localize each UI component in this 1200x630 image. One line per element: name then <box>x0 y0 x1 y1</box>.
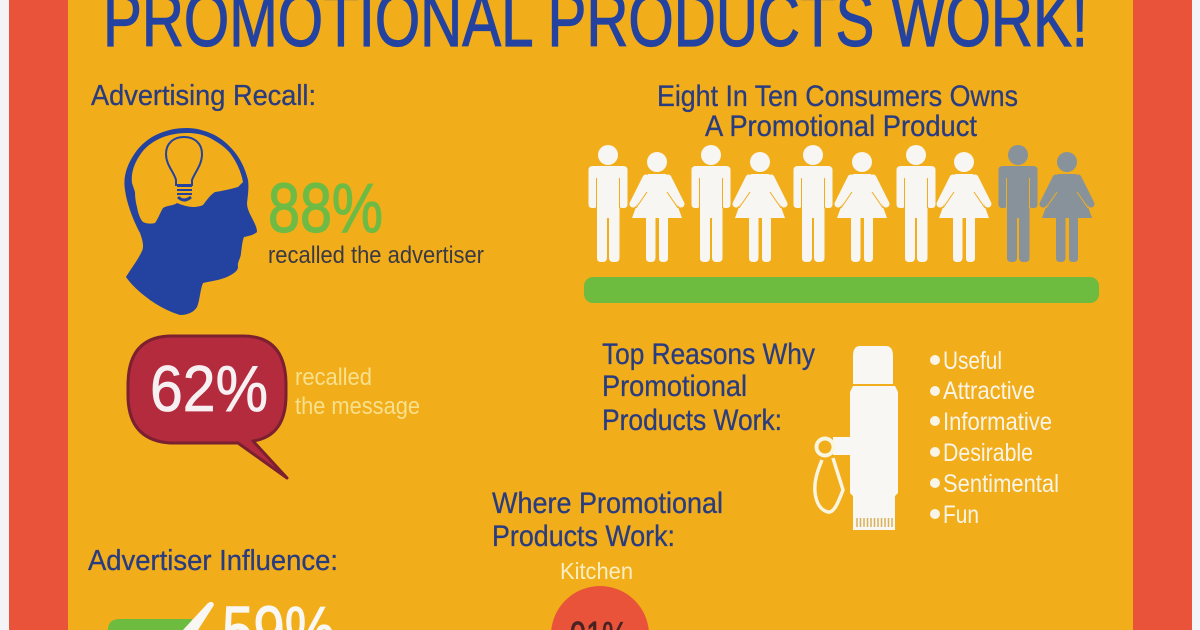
heading: where promotional products work: Where Promotional <box>492 487 723 520</box>
speech bubble: 62% <box>128 336 287 478</box>
label: recalled the message: recalled <box>295 364 372 391</box>
list: reasons: Useful <box>943 347 1002 375</box>
heading: top reasons: Top Reasons Why <box>602 338 815 371</box>
icon: head with light bulb <box>124 128 257 315</box>
heading: where promotional products work <box>492 487 723 553</box>
list: reasons: Informative <box>943 408 1052 436</box>
pictogram: people <box>588 145 1092 262</box>
stat: 88%: 88% <box>268 169 383 247</box>
list: reasons: Fun <box>943 501 979 529</box>
heading: advertising recall: Advertising Recall: <box>91 80 316 112</box>
icon: thermos <box>815 346 898 530</box>
heading: advertiser influence: Advertiser Influence: <box>88 545 338 577</box>
heading: top reasons: Promotional <box>602 370 747 403</box>
speech bubble: 62%: 62% <box>150 352 268 425</box>
heading: top reasons <box>602 338 815 437</box>
heading: where promotional products work: Products Work: <box>492 520 675 553</box>
label: recalled the message <box>295 364 420 420</box>
label: kitchen: Kitchen <box>560 558 633 584</box>
heading: eight in ten <box>657 80 1018 143</box>
label: recalled the message: the message <box>295 393 420 420</box>
list: reasons: Desirable <box>943 439 1033 467</box>
list: reasons: Sentimental <box>943 470 1059 498</box>
icon: green box with check <box>108 602 214 630</box>
heading: eight in ten: A Promotional Product <box>705 110 978 143</box>
label: recalled the advertiser: recalled the advertiser <box>268 242 484 269</box>
list: reasons <box>930 347 1059 529</box>
heading: eight in ten: Eight In Ten Consumers Owns <box>657 80 1018 113</box>
icon: bulb <box>166 137 202 200</box>
circle: kitchen 91% <box>551 586 649 630</box>
green bar <box>584 277 1099 303</box>
list: reasons: Attractive <box>943 377 1035 405</box>
heading: top reasons: Products Work: <box>602 404 782 437</box>
